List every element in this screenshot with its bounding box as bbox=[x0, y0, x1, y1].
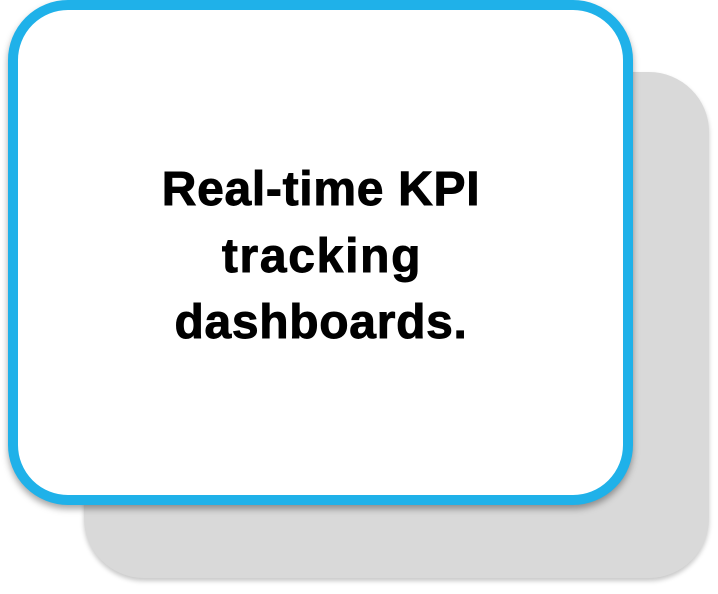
text block: main statement: tracking bbox=[222, 230, 422, 283]
text block: main statement: dashboards. bbox=[174, 296, 468, 349]
panel: grey back card bbox=[84, 72, 709, 578]
text block: main statement bbox=[162, 163, 480, 349]
text block: main statement: Real-time KPI bbox=[162, 163, 480, 216]
panel: blue outlined front card bbox=[8, 0, 633, 505]
